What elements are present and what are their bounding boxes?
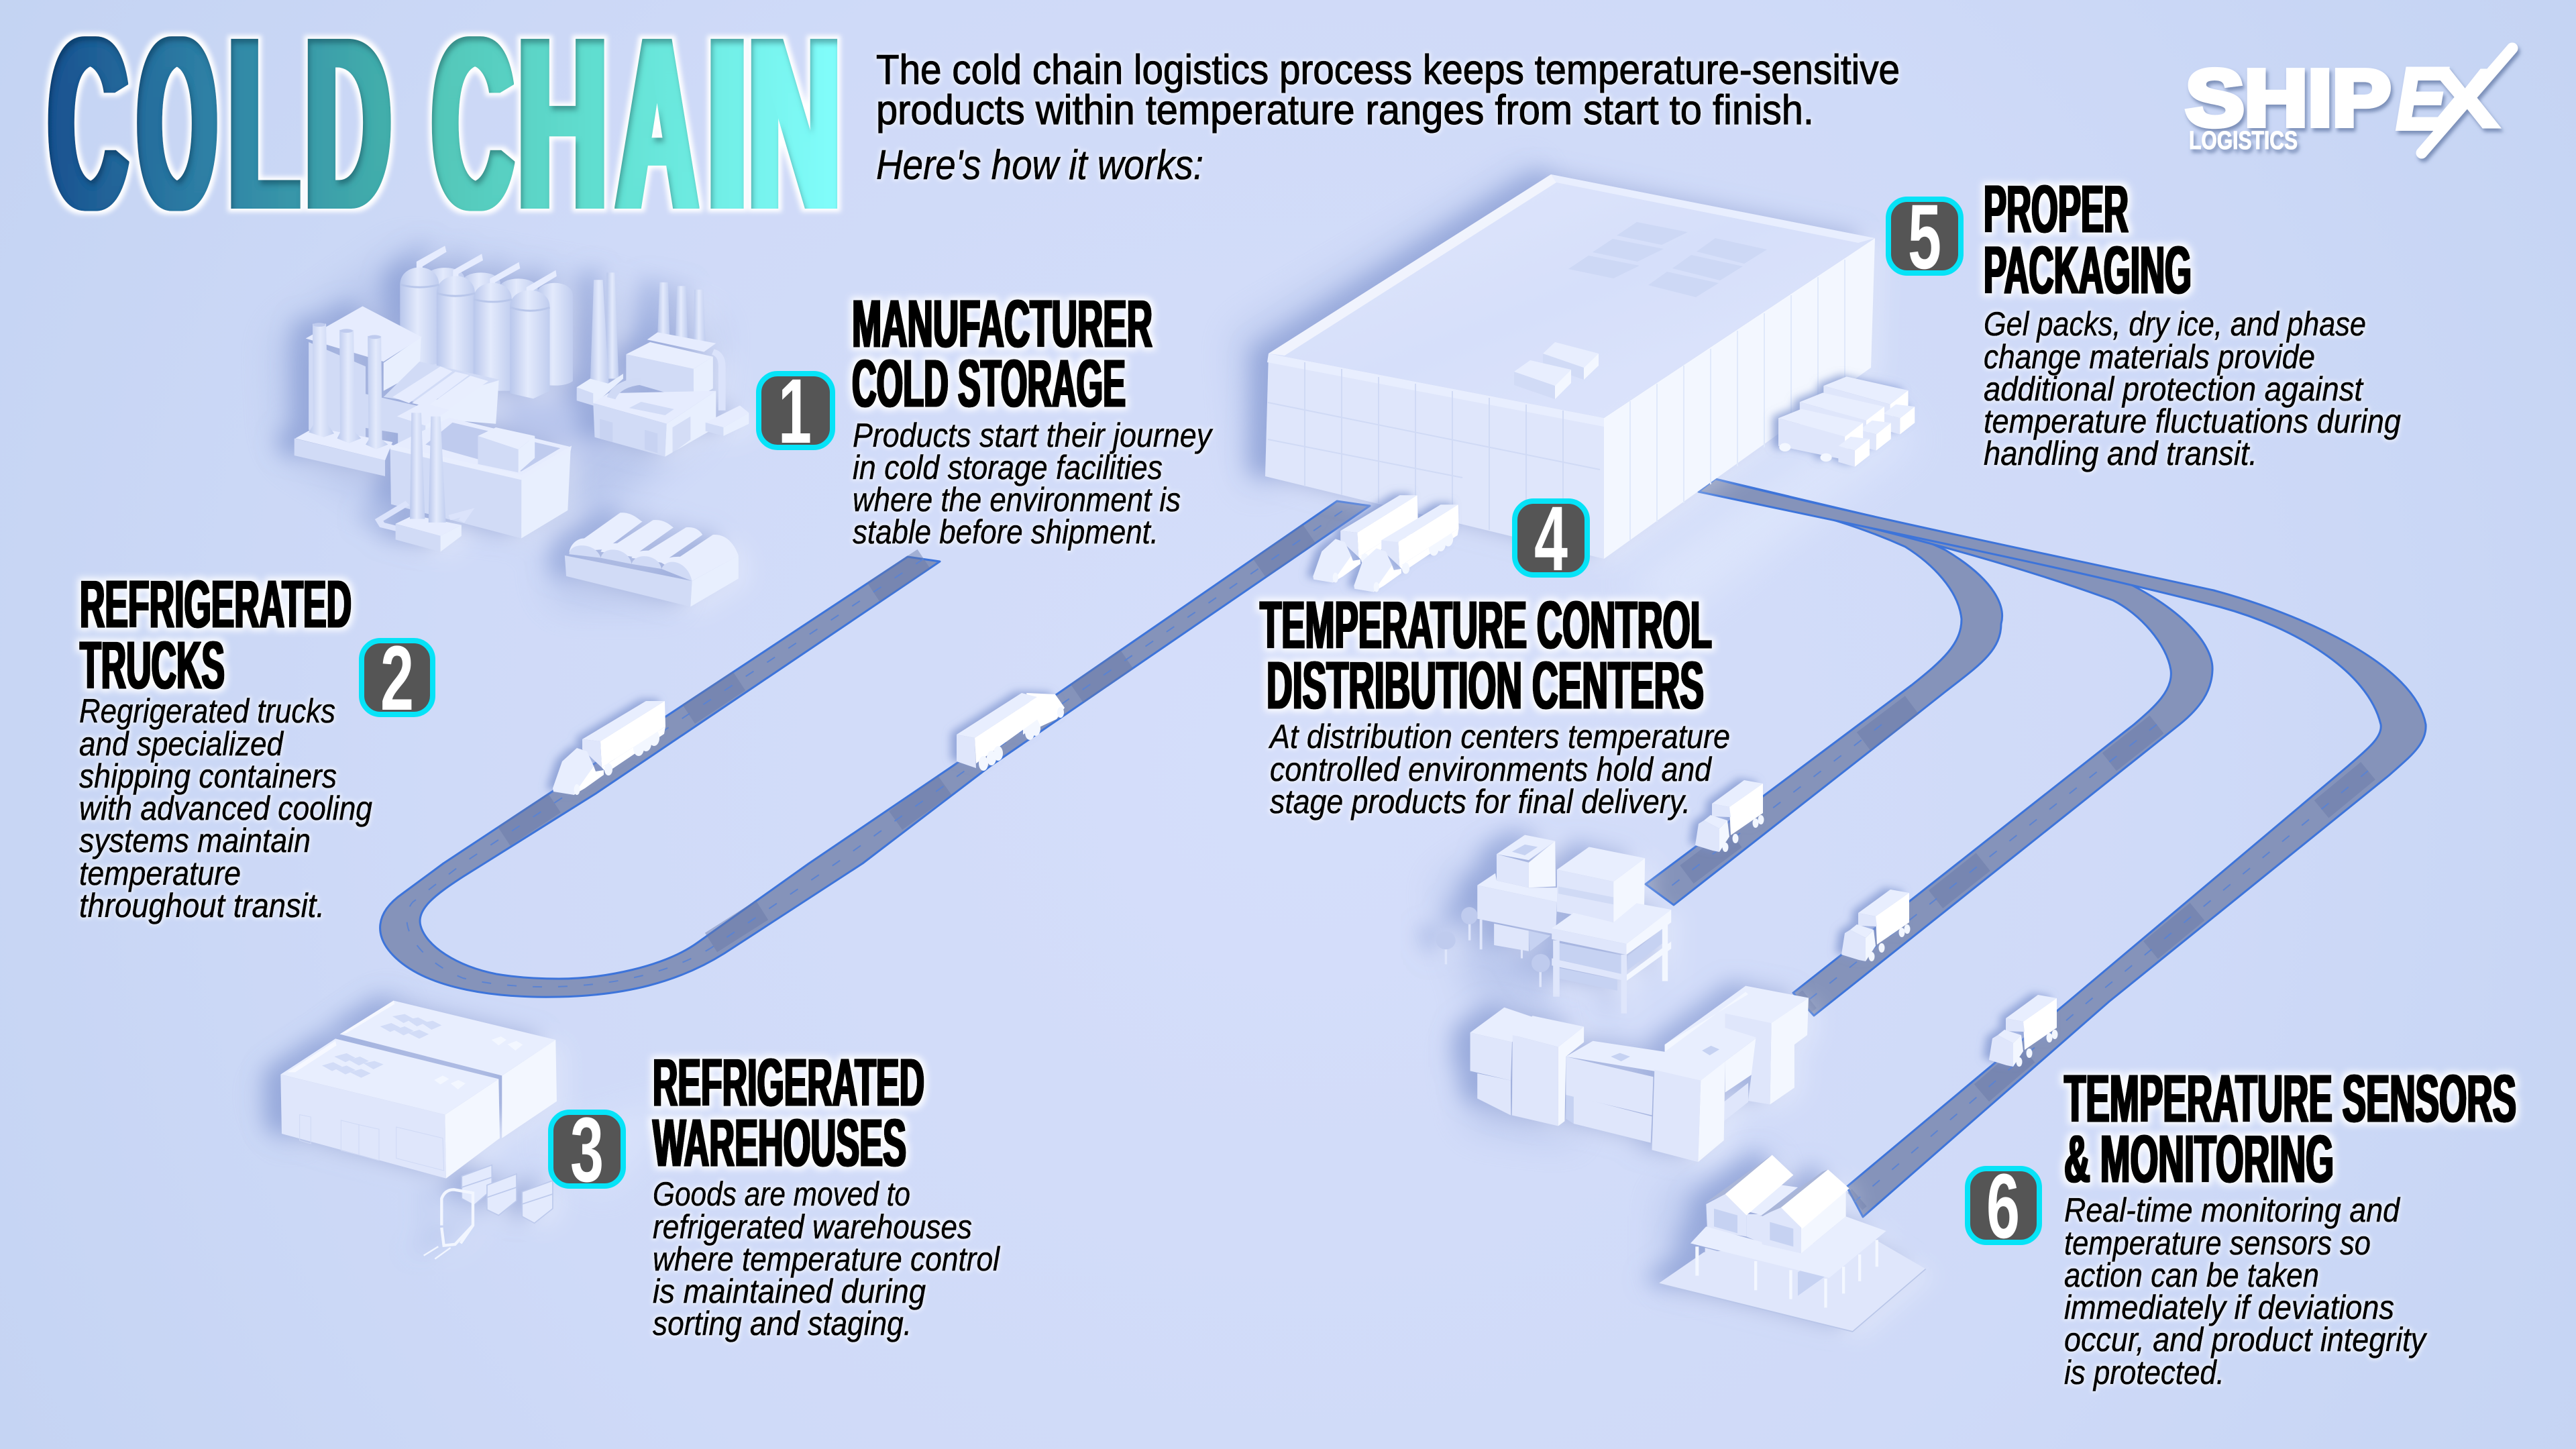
badge 6: 6 xyxy=(1986,1155,2020,1258)
badge 1: 1 xyxy=(778,360,812,463)
silos xyxy=(400,246,573,398)
road: to second destination xyxy=(1699,479,2212,1016)
description 1: Products start their journey xyxy=(853,417,1214,454)
description 6: occur, and product integrity xyxy=(2064,1321,2428,1358)
icon: trucks at warehouse dock xyxy=(1313,495,1459,592)
panel: step 1 manufacturer cold storage xyxy=(759,286,1214,551)
description 5: temperature fluctuations during xyxy=(1984,402,2401,440)
badge 5: 5 xyxy=(1908,186,1941,288)
icon: box trucks by warehouse side xyxy=(1778,376,1915,467)
logo: ShipEx Logistics: X xyxy=(2430,52,2500,146)
description 3: sorting and staging. xyxy=(653,1305,912,1342)
small tower xyxy=(397,402,449,449)
description 6: is protected. xyxy=(2064,1354,2224,1391)
road: to first destination xyxy=(1646,479,2002,905)
heading 1: COLD STORAGE xyxy=(852,346,1126,421)
icon: apartment building xyxy=(1436,835,1671,1014)
lit ground glow xyxy=(537,396,1919,1194)
heading 4 xyxy=(1260,588,1712,723)
icon: supermarket building xyxy=(1470,986,1809,1162)
icon: refrigerated warehouse with forklift xyxy=(280,1001,557,1259)
description 1: where the environment is xyxy=(853,481,1181,519)
heading 1 xyxy=(852,286,1152,421)
description 6 xyxy=(2064,1191,2428,1391)
icon: semi truck heading back xyxy=(957,693,1065,771)
description 5: additional protection against xyxy=(1984,370,2364,408)
heading 6 xyxy=(2064,1061,2516,1197)
badge 3: 3 xyxy=(570,1099,604,1201)
description 3: is maintained during xyxy=(653,1273,926,1310)
heading 3 xyxy=(653,1045,924,1181)
badge 1 xyxy=(759,360,833,463)
description 6: Real-time monitoring and xyxy=(2064,1191,2401,1229)
description 1 xyxy=(853,417,1214,551)
panel: step 6 temperature sensors and monitoring xyxy=(1968,1061,2516,1391)
description 4: stage products for final delivery. xyxy=(1270,783,1690,820)
heading 2 xyxy=(80,567,352,703)
icon: house xyxy=(1658,1155,1926,1332)
description 3 xyxy=(653,1175,1001,1342)
heading 1: MANUFACTURER xyxy=(852,286,1152,362)
panel: step 3 refrigerated warehouses xyxy=(551,1045,1001,1342)
intro text: The cold chain logistics process keeps temperature-sensitive xyxy=(876,47,1900,93)
right boiler building xyxy=(593,282,749,457)
panel: step 2 refrigerated trucks xyxy=(79,567,433,924)
road: to third destination xyxy=(1699,479,2426,1217)
intro text xyxy=(876,47,1900,189)
heading 2: TRUCKS xyxy=(80,628,225,703)
description 3: Goods are moved to xyxy=(653,1175,910,1213)
heading 2: REFRIGERATED xyxy=(80,567,352,642)
trees xyxy=(1436,907,1550,987)
base and three stacks xyxy=(294,323,392,476)
description 6: immediately if deviations xyxy=(2064,1289,2394,1326)
intro text: Here's how it works: xyxy=(876,142,1203,189)
soft ground shadows xyxy=(262,161,1771,1288)
heading 5 xyxy=(1984,172,2192,308)
panel: step 4 temperature control distribution centers xyxy=(1260,488,1730,820)
pallet racks and forklift xyxy=(462,1165,553,1223)
description 5: handling and transit. xyxy=(1984,435,2257,472)
description 2: shipping containers xyxy=(79,757,337,795)
description 2: Regrigerated trucks xyxy=(79,692,335,730)
description 3: refrigerated warehouses xyxy=(653,1208,972,1246)
description 2: and specialized xyxy=(79,725,284,763)
description 5: change materials provide xyxy=(1984,338,2315,376)
description 4: controlled environments hold and xyxy=(1270,751,1713,788)
description 2: temperature xyxy=(79,855,241,892)
description 6: temperature sensors so xyxy=(2064,1224,2371,1262)
description 2: throughout transit. xyxy=(79,887,325,924)
icon: semi truck on road xyxy=(553,701,665,795)
tall chimneys xyxy=(577,272,623,405)
description 2: systems maintain xyxy=(79,822,311,859)
logo: ShipEx Logistics: SHIP xyxy=(2186,54,2391,143)
badge 2: 2 xyxy=(380,627,414,730)
logo: ShipEx Logistics: E xyxy=(2396,50,2448,148)
heading 3: WAREHOUSES xyxy=(653,1106,906,1181)
heading 4: DISTRIBUTION CENTERS xyxy=(1267,648,1704,723)
icon: delivery truck one xyxy=(1695,780,1764,852)
arched roof building xyxy=(565,513,739,606)
heading 6: & MONITORING xyxy=(2064,1122,2334,1197)
description 1: stable before shipment. xyxy=(853,513,1159,551)
roof skylights xyxy=(1568,222,1767,297)
rooftop units xyxy=(1514,342,1599,399)
panel: step 5 proper packaging xyxy=(1888,172,2401,472)
heading 4: TEMPERATURE CONTROL xyxy=(1260,588,1712,663)
badge 4: 4 xyxy=(1534,488,1568,590)
description 5 xyxy=(1984,305,2401,472)
icon: central distribution warehouse xyxy=(1265,174,1875,559)
road: loop to manufacturer xyxy=(380,501,1370,997)
description 3: where temperature control xyxy=(653,1240,1001,1278)
main front block xyxy=(390,418,572,539)
description 4: At distribution centers temperature xyxy=(1268,718,1730,755)
logo: ShipEx Logistics: LOGISTICS xyxy=(2189,127,2298,155)
description 2 xyxy=(79,692,372,924)
description 1: in cold storage facilities xyxy=(853,449,1163,486)
front stacks with base xyxy=(379,413,468,552)
title xyxy=(49,0,841,260)
sawtooth roof building xyxy=(384,362,500,424)
icon: manufacturer factory complex xyxy=(294,246,749,606)
description 5: Gel packs, dry ice, and phase xyxy=(1984,305,2366,343)
description 2: with advanced cooling xyxy=(79,790,372,827)
description 4 xyxy=(1268,718,1730,820)
back-left building xyxy=(306,307,437,445)
icon: delivery truck two xyxy=(1841,890,1911,961)
intro text: products within temperature ranges from start to finish. xyxy=(876,87,1814,133)
heading 5: PACKAGING xyxy=(1984,233,2192,308)
logo: ShipEx Logistics xyxy=(2186,48,2512,155)
icon: delivery truck three xyxy=(1989,995,2058,1067)
description 6: action can be taken xyxy=(2064,1256,2319,1294)
heading 3: REFRIGERATED xyxy=(653,1045,924,1120)
heading 5: PROPER xyxy=(1984,172,2129,247)
